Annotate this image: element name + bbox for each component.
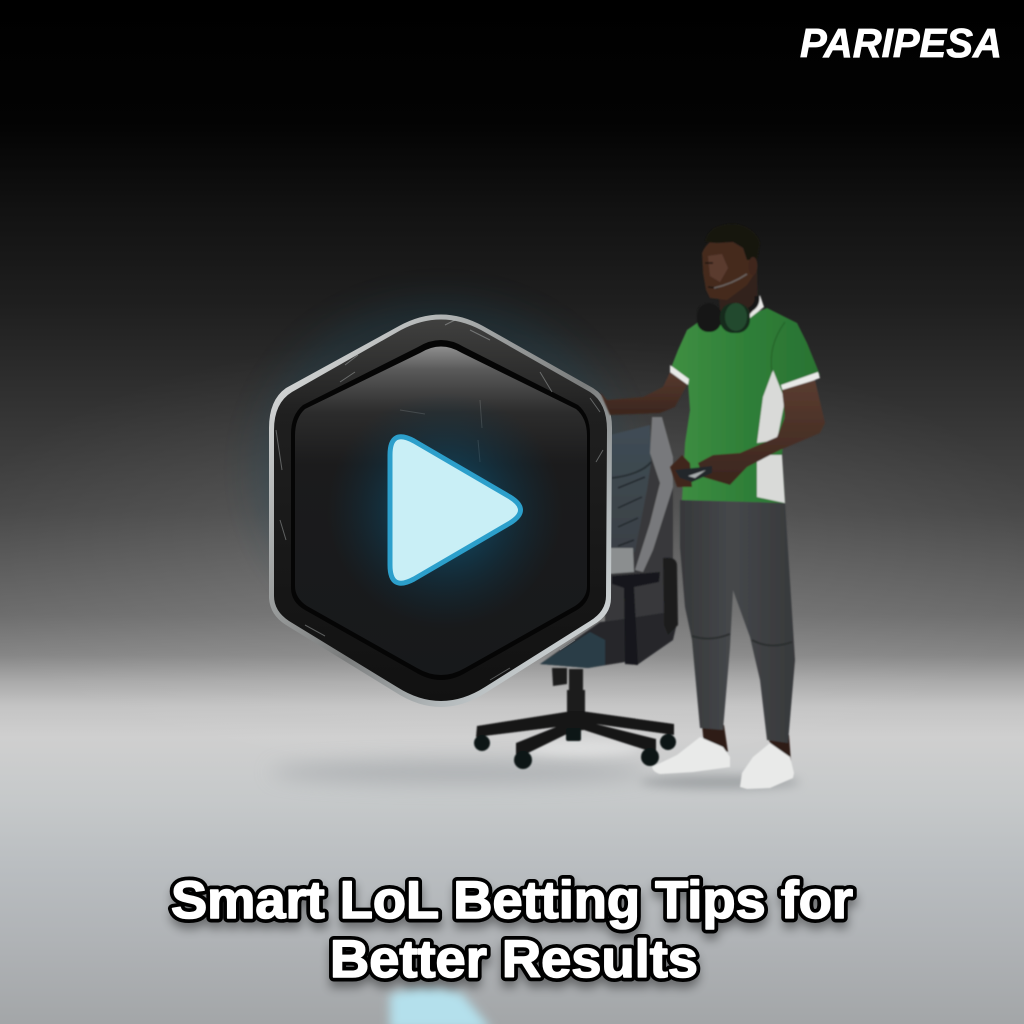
left sleeve cuff: [670, 365, 689, 385]
chair stitching: [618, 477, 645, 546]
badge inner groove: [291, 340, 590, 680]
badge metal rim: [269, 314, 612, 707]
chair gas lift: [567, 669, 585, 716]
title outline: Smart LoL Betting Tips for: [171, 871, 853, 930]
badge dark frame: [274, 320, 607, 701]
ankles: [702, 725, 791, 762]
title shadow: Smart LoL Betting Tips for: [172, 878, 854, 937]
neck: [718, 270, 758, 328]
badge scratches: [276, 320, 603, 680]
eye and lips: [705, 263, 718, 288]
shirt: [670, 308, 820, 503]
play button glow: [327, 392, 563, 628]
badge inner panel: [295, 346, 587, 675]
headphones: [697, 296, 757, 333]
shirt sleeve seam: [771, 322, 785, 372]
ear: [748, 257, 758, 275]
chair lumbar pillow: [606, 548, 634, 574]
head: [702, 224, 760, 300]
left arm: [600, 368, 688, 415]
title lettering: Better Results: [330, 930, 698, 989]
shirt collar: [750, 295, 764, 318]
title shadow: [172, 878, 854, 996]
floor shadow: [270, 740, 800, 789]
title: [171, 871, 854, 996]
gaming chair: [474, 417, 678, 769]
chair side wing: [605, 450, 678, 640]
hexagon play badge: [269, 314, 612, 707]
right shoe: [740, 743, 794, 789]
game controller: [675, 466, 712, 482]
man standing with controller: [600, 224, 825, 789]
left shoe: [652, 737, 730, 774]
chair armrest: [612, 572, 660, 665]
chair casters: [474, 728, 676, 769]
logo: PARIPESA: [800, 20, 1002, 66]
trousers: [680, 500, 795, 743]
title outline: Better Results: [330, 930, 698, 989]
floor light reflection: [390, 988, 492, 1024]
play button: [390, 437, 520, 583]
chair back cushion: [606, 425, 651, 552]
right sleeve cuff: [781, 372, 820, 392]
title lettering: [171, 871, 853, 989]
shirt white side panel: [757, 370, 785, 503]
chair seat: [540, 613, 677, 668]
right arm: [698, 380, 825, 485]
chair side plate: [663, 558, 678, 635]
microphone boom: [714, 274, 747, 288]
left hand on controller: [670, 455, 692, 487]
title lettering: Smart LoL Betting Tips for: [171, 871, 853, 930]
chair star base: [476, 711, 674, 755]
title shadow: Better Results: [330, 937, 698, 996]
hair: [705, 224, 760, 260]
title outline: [171, 871, 853, 989]
chair headrest seam: [612, 462, 651, 478]
chair light strap: [635, 417, 673, 572]
